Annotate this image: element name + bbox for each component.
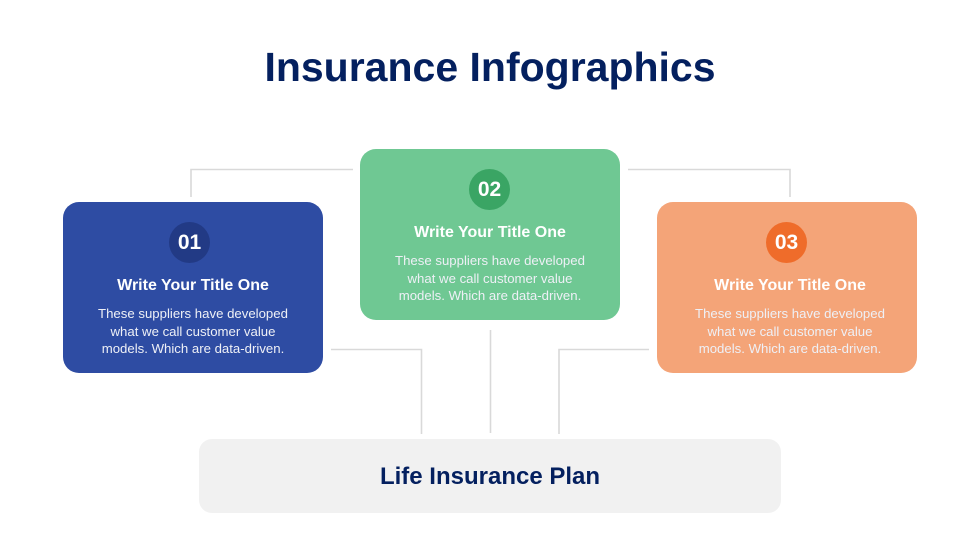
panel: card 02: [360, 149, 620, 320]
panel: card 03: [657, 202, 917, 373]
card 03 heading: Write Your Title One: [714, 277, 866, 294]
card 01 text: These suppliers have developed: [98, 306, 288, 321]
panel: life insurance plan: [199, 439, 781, 513]
panel: life insurance plan: Life Insurance Plan: [380, 463, 600, 490]
card 03 text: [695, 306, 885, 356]
card 01 text: what we call customer value: [111, 324, 275, 338]
card 02 text: [395, 253, 585, 303]
badge: 03: 03: [775, 231, 798, 254]
card 01 heading: Write Your Title One: [117, 277, 269, 294]
card 01 text: models. Which are data-driven.: [102, 341, 284, 356]
card 01 text: [98, 306, 288, 356]
badge: 01: [169, 222, 210, 263]
card 02 text: models. Which are data-driven.: [399, 288, 581, 303]
card 02 text: These suppliers have developed: [395, 253, 585, 268]
badge: 02: [469, 169, 510, 210]
title: Insurance Infographics: [264, 44, 716, 90]
card 03 text: models. Which are data-driven.: [699, 341, 881, 356]
card 02 heading: Write Your Title One: [414, 224, 566, 241]
card 02 text: what we call customer value: [408, 270, 572, 286]
panel: card 01: [63, 202, 323, 373]
badge: 01: 01: [178, 231, 201, 254]
card 03 text: what we call customer value: [708, 324, 872, 338]
card 03 text: These suppliers have developed: [695, 306, 885, 321]
badge: 02: 02: [478, 178, 501, 201]
badge: 03: [766, 222, 807, 263]
